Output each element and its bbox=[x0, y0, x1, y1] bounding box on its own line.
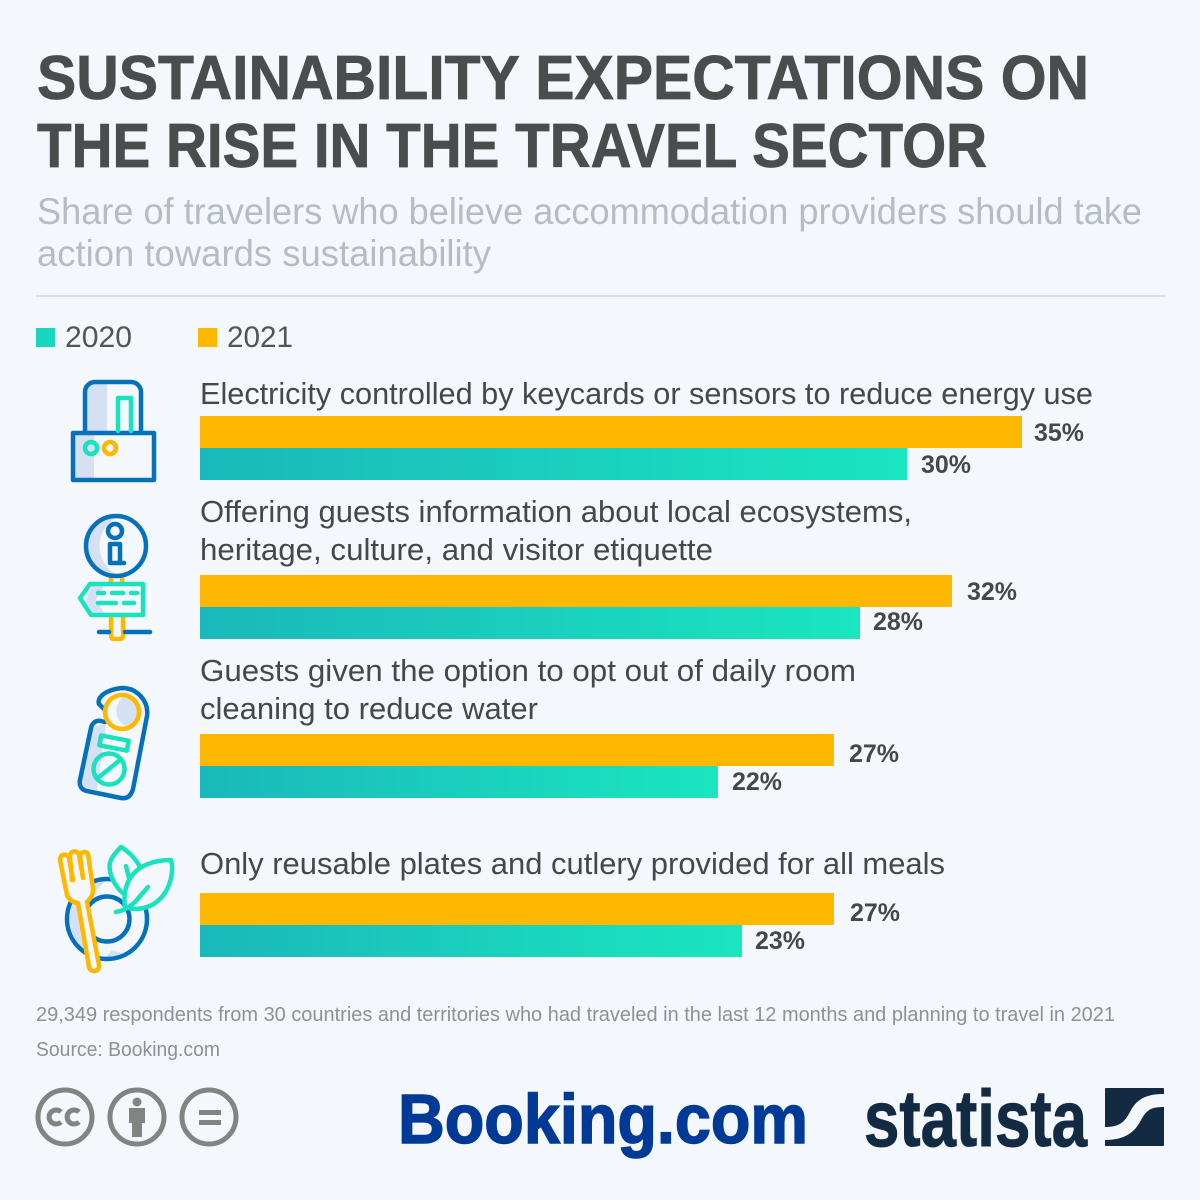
logo: Booking.com: Booking.com bbox=[398, 1080, 808, 1158]
bar: 2021 27% bbox=[200, 893, 834, 925]
value 32%: 32% bbox=[967, 578, 1017, 606]
logo: statista: statista bbox=[864, 1074, 1087, 1163]
label: row 4: Only reusable plates and cutlery provided for all meals bbox=[200, 846, 945, 881]
footnote and source bbox=[36, 1004, 1115, 1061]
row: reusable plates bbox=[60, 846, 945, 971]
value 27%: 27% bbox=[849, 740, 899, 768]
label: row 3: Guests given the option to opt out of daily room bbox=[200, 653, 856, 688]
footnote and source: Source: Booking.com bbox=[36, 1039, 220, 1061]
bar: 2021 32% bbox=[200, 575, 952, 607]
label: row 3 bbox=[200, 653, 856, 726]
icon: info signpost bbox=[80, 516, 150, 639]
label: row 1: Electricity controlled by keycards or sensors to reduce energy use bbox=[200, 376, 1093, 411]
subtitle bbox=[37, 191, 1142, 274]
bar: 2021 27% bbox=[200, 734, 834, 766]
title: THE RISE IN THE TRAVEL SECTOR bbox=[37, 112, 987, 181]
icon: plate, fork and leaves bbox=[60, 847, 172, 971]
label: row 2 bbox=[200, 494, 912, 567]
icons: creative commons licence bbox=[38, 1090, 236, 1144]
value 27%: 27% bbox=[850, 899, 900, 927]
icon: door hanger bbox=[80, 688, 147, 798]
legend bbox=[36, 321, 293, 354]
row: information bbox=[80, 494, 1017, 639]
title: SUSTAINABILITY EXPECTATIONS ON bbox=[37, 44, 1089, 113]
value 23%: 23% bbox=[755, 927, 805, 955]
bar: 2021 35% bbox=[200, 416, 1022, 448]
bar: 2020 23% bbox=[200, 925, 742, 957]
value 22%: 22% bbox=[732, 768, 782, 796]
legend: 2021 bbox=[227, 321, 293, 354]
subtitle: action towards sustainability bbox=[37, 233, 491, 274]
value 28%: 28% bbox=[873, 608, 923, 636]
label: row 2: heritage, culture, and visitor etiquette bbox=[200, 532, 713, 567]
legend: 2020 bbox=[65, 321, 132, 354]
label: row 3: cleaning to reduce water bbox=[200, 691, 538, 726]
bar: 2020 28% bbox=[200, 607, 860, 639]
title bbox=[37, 44, 1089, 181]
label: row 2: Offering guests information about local ecosystems, bbox=[200, 494, 912, 529]
subtitle: Share of travelers who believe accommodation providers should take bbox=[37, 191, 1142, 232]
icon: keycard holder bbox=[73, 382, 154, 480]
bar: 2020 30% bbox=[200, 448, 907, 480]
bar: 2020 22% bbox=[200, 766, 718, 798]
row: keycards bbox=[73, 376, 1093, 480]
footnote and source: 29,349 respondents from 30 countries and territories who had traveled in the last 12 months and planning to travel in 2021 bbox=[36, 1004, 1115, 1026]
value 30%: 30% bbox=[921, 451, 971, 479]
value 35%: 35% bbox=[1034, 419, 1084, 447]
row: room cleaning bbox=[80, 653, 899, 798]
